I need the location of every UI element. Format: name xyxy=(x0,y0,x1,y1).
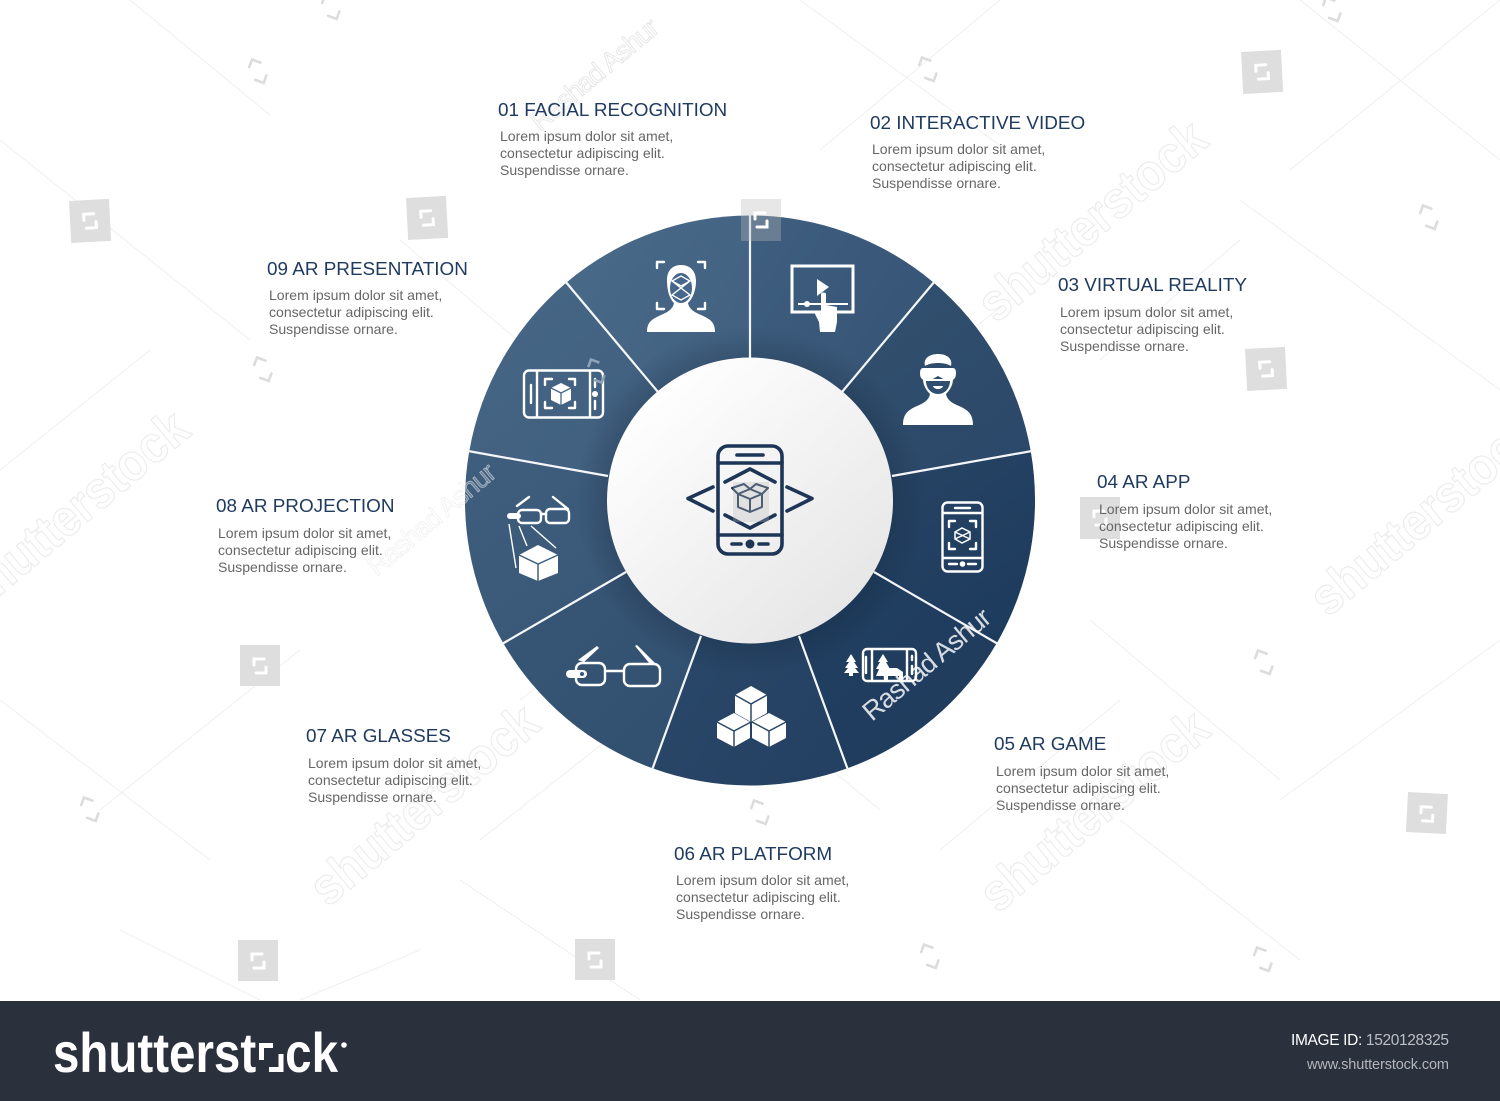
footer logo: shutterstock xyxy=(53,1021,339,1084)
text block 09 xyxy=(267,259,468,337)
text block 09: Suspendisse ornare. xyxy=(269,321,398,337)
center circle xyxy=(607,358,893,644)
segment dividers xyxy=(468,213,1032,770)
footer image id: IMAGE ID: 1520128325 xyxy=(1291,1032,1449,1049)
text block 01: 01 FACIAL RECOGNITION xyxy=(498,100,727,121)
watermark: author names over donut: Rashad Ashur xyxy=(857,602,997,727)
text block 02: 02 INTERACTIVE VIDEO xyxy=(870,113,1085,134)
watermark: author names over donut: Rashad Ashur xyxy=(362,457,502,582)
text block 07: 07 AR GLASSES xyxy=(306,726,451,747)
text block 02: Suspendisse ornare. xyxy=(872,175,1001,191)
text block 07: Suspendisse ornare. xyxy=(308,789,437,805)
text block 05: consectetur adipiscing elit. xyxy=(996,780,1161,796)
segment 2 xyxy=(750,216,933,500)
text block 06: Suspendisse ornare. xyxy=(676,906,805,922)
text block 03 xyxy=(1058,275,1247,354)
text block 05: Suspendisse ornare. xyxy=(996,797,1125,813)
text block 09: Lorem ipsum dolor sit amet, xyxy=(269,287,442,303)
segment 3 xyxy=(750,282,1031,500)
icon: virtual reality xyxy=(903,354,973,425)
icon: AR app phone xyxy=(942,502,982,572)
text block 05 xyxy=(994,734,1169,813)
icon: AR glasses xyxy=(566,645,660,686)
segment 5 xyxy=(750,500,997,768)
text block 02: Lorem ipsum dolor sit amet, xyxy=(872,141,1045,157)
text block 08 xyxy=(216,496,394,575)
icon: AR presentation xyxy=(524,370,603,418)
text block 02: consectetur adipiscing elit. xyxy=(872,158,1037,174)
watermark: logo tiles xyxy=(69,50,1448,981)
footer bar xyxy=(0,1001,1500,1101)
text block 04 xyxy=(1097,472,1272,551)
icon: AR projection xyxy=(507,497,569,581)
icon: interactive video xyxy=(792,266,853,332)
watermark: shutterstock text: shutterstock xyxy=(968,699,1220,923)
footer website: www.shutterstock.com xyxy=(1306,1057,1449,1073)
donut chart: nine segments xyxy=(465,213,1035,785)
center icon: AR phone xyxy=(688,446,812,554)
text block 03: 03 VIRTUAL REALITY xyxy=(1058,275,1247,296)
segment 7 xyxy=(503,500,750,768)
text block 04: consectetur adipiscing elit. xyxy=(1099,518,1264,534)
text block 05: 05 AR GAME xyxy=(994,734,1106,755)
segment 1 xyxy=(567,216,750,500)
text block 06: Lorem ipsum dolor sit amet, xyxy=(676,872,849,888)
text block 04: Suspendisse ornare. xyxy=(1099,535,1228,551)
watermark: author name: Rashad Ashur xyxy=(525,12,665,137)
text block 07: consectetur adipiscing elit. xyxy=(308,772,473,788)
segment 8 xyxy=(465,451,750,643)
inner shadow ring xyxy=(575,326,925,676)
text block 03: Lorem ipsum dolor sit amet, xyxy=(1060,304,1233,320)
text block 09: consectetur adipiscing elit. xyxy=(269,304,434,320)
text block 08: Suspendisse ornare. xyxy=(218,559,347,575)
segment 4 xyxy=(750,451,1035,643)
text block 01 xyxy=(498,100,727,178)
text block 08: Lorem ipsum dolor sit amet, xyxy=(218,525,391,541)
icon: facial recognition xyxy=(647,262,715,332)
watermark: author names over donut xyxy=(362,457,997,727)
text block 06: consectetur adipiscing elit. xyxy=(676,889,841,905)
watermark: shutterstock text: shutterstock xyxy=(298,693,550,917)
text block 01: consectetur adipiscing elit. xyxy=(500,145,665,161)
text block 06 xyxy=(674,844,849,922)
icon: AR game xyxy=(844,649,916,681)
text block 04: 04 AR APP xyxy=(1097,472,1190,493)
watermark: shutterstock text: shutterstock xyxy=(966,109,1218,333)
text block 06: 06 AR PLATFORM xyxy=(674,844,832,865)
text block 02 xyxy=(870,113,1085,191)
text block 01: Lorem ipsum dolor sit amet, xyxy=(500,128,673,144)
segment 9 xyxy=(469,282,750,500)
text block 05: Lorem ipsum dolor sit amet, xyxy=(996,763,1169,779)
text block 03: Suspendisse ornare. xyxy=(1060,338,1189,354)
text block 01: Suspendisse ornare. xyxy=(500,162,629,178)
icon: AR platform cubes xyxy=(717,686,786,747)
text block 07 xyxy=(306,726,481,805)
text block 09: 09 AR PRESENTATION xyxy=(267,259,468,280)
text block 08: 08 AR PROJECTION xyxy=(216,496,394,517)
text block 08: consectetur adipiscing elit. xyxy=(218,542,383,558)
text block 04: Lorem ipsum dolor sit amet, xyxy=(1099,501,1272,517)
text block 07: Lorem ipsum dolor sit amet, xyxy=(308,755,481,771)
text block 03: consectetur adipiscing elit. xyxy=(1060,321,1225,337)
segment 6 xyxy=(652,500,848,785)
